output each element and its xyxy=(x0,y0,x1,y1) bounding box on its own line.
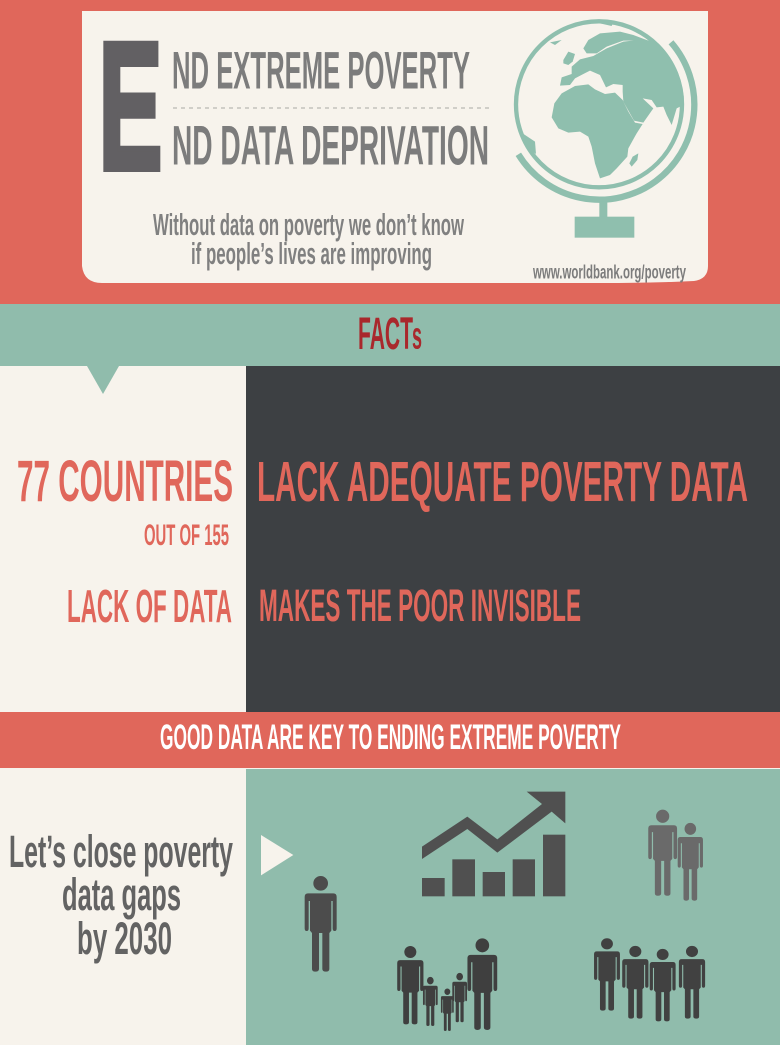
icon: play arrow xyxy=(261,835,293,875)
icon: group of four people xyxy=(594,938,705,1021)
infographic canvas: ND EXTREME POVERTY xyxy=(172,42,470,100)
panel: facts right column xyxy=(246,366,780,712)
icon: family xyxy=(397,938,497,1031)
call to action text xyxy=(9,826,233,964)
subtitle: if people’s lives are improving xyxy=(191,236,432,271)
call to action text: data gaps xyxy=(62,869,181,920)
stat: 77 countries: 77 COUNTRIES xyxy=(17,449,233,514)
subtitle xyxy=(153,207,464,271)
facts heading: FACT xyxy=(358,308,413,359)
panel: header background xyxy=(0,0,780,304)
panel: header card xyxy=(82,11,708,283)
panel: icons background xyxy=(246,769,780,1045)
facts heading xyxy=(358,308,422,359)
call to action text: by 2030 xyxy=(77,913,172,964)
subtitle: Without data on poverty we don’t know xyxy=(153,207,464,242)
icon: banner pointer xyxy=(87,366,119,394)
icon: rising chart xyxy=(422,792,565,896)
icon group coordinates xyxy=(261,792,705,1031)
panel: key message banner xyxy=(0,712,780,768)
infographic canvas: OUT OF 155 xyxy=(144,519,229,552)
panel: call to action xyxy=(0,768,246,1045)
call to action text: Let’s close poverty xyxy=(9,826,233,877)
infographic canvas: LACK OF DATA xyxy=(67,580,232,632)
icon: two people xyxy=(648,810,703,901)
icon: single person xyxy=(305,876,337,972)
icon: globe xyxy=(516,17,694,238)
panel: facts left column xyxy=(0,366,246,712)
infographic canvas: s xyxy=(412,316,422,358)
panel: facts banner xyxy=(0,304,780,366)
title initial E: E xyxy=(98,4,162,208)
website link: www.worldbank.org/poverty xyxy=(532,262,686,284)
